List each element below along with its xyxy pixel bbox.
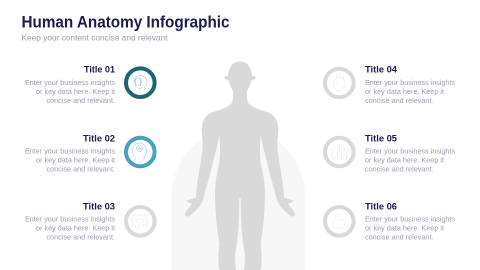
text block: title 01: or key data here. Keep it [36,87,115,96]
heading: title 06: Title 06 [365,201,397,211]
text block: title 05: or key data here. Keep it [365,156,444,164]
text block: title 04: concise and relevant. [365,96,434,105]
human body silhouette [185,62,295,270]
icon: lungs on grey ring [325,138,354,166]
icon: ear on teal ring [126,68,155,97]
icon: stomach on grey ring [325,207,354,236]
text block: title 06: Enter your business insights [365,214,455,224]
text block: title 06: concise and relevant. [365,232,434,242]
text block: title 02: concise and relevant. [46,164,115,174]
title: Human Anatomy Infographic [22,14,230,32]
text block: title 03: or key data here. Keep it [36,224,115,232]
text block: title 03: Enter your business insights [25,214,115,224]
text block: title 06 [365,214,455,242]
subtitle: Keep your content concise and relevant [22,34,168,43]
panel: title 01 [25,64,155,105]
panel: title 04 [325,64,455,105]
heading: title 05: Title 05 [365,133,397,143]
text block: title 03: concise and relevant. [46,232,115,242]
panel: title 06 [325,201,455,242]
text block: title 05 [365,146,455,174]
panel: title 02 [25,133,155,174]
text block: title 03 [25,214,115,242]
panel: title 05 [325,133,455,174]
backdrop arch [172,128,305,270]
text block: title 01: Enter your business insights [25,78,115,87]
panel: title 03 [25,201,155,242]
text block: title 04: Enter your business insights [365,78,455,87]
heading: title 02: Title 02 [83,133,115,143]
icon: head with brain on blue ring [126,138,155,166]
text block: title 05: Enter your business insights [365,146,455,156]
text block: title 02: Enter your business insights [25,146,115,156]
text block: title 04: or key data here. Keep it [365,87,444,96]
text block: title 06: or key data here. Keep it [365,224,444,232]
text block: title 04 [365,78,455,105]
text block: title 01: concise and relevant. [46,96,115,105]
heading: title 01: Title 01 [84,64,115,74]
icon: heart on grey ring [325,69,354,97]
text block: title 01 [25,78,115,105]
text block: title 02 [25,146,115,174]
icon: intestine on grey ring [126,207,155,236]
text block: title 05: concise and relevant. [365,164,434,174]
text block: title 02: or key data here. Keep it [36,156,115,164]
heading: title 04: Title 04 [365,64,398,74]
heading: title 03: Title 03 [83,201,115,211]
